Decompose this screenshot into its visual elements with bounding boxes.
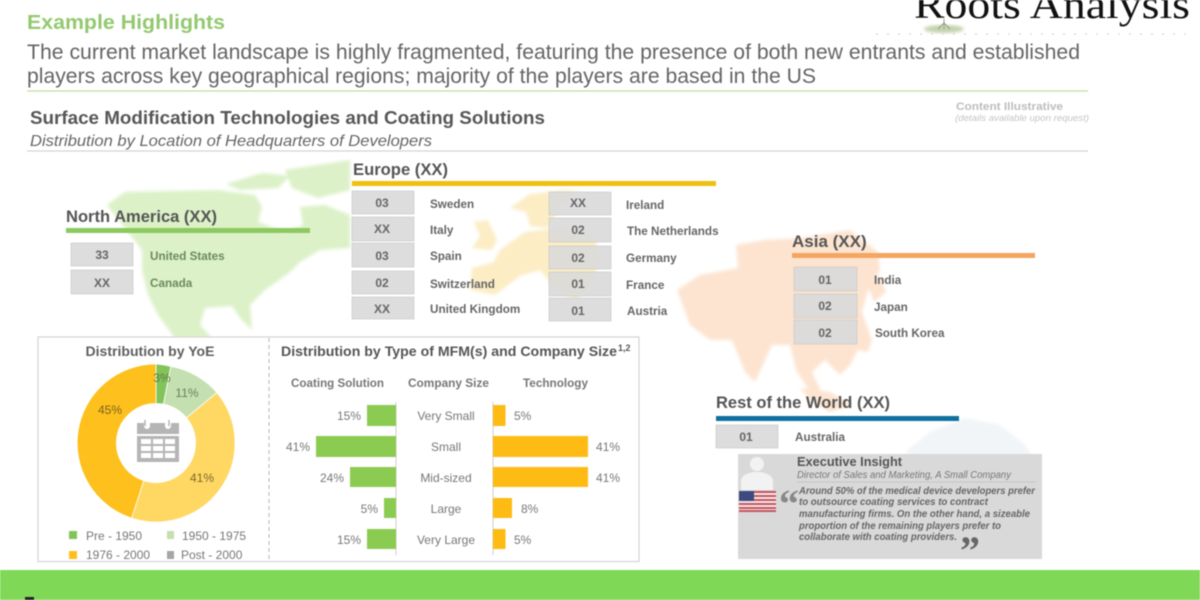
content illustrative note (955, 101, 1089, 123)
map: Europe (470, 190, 600, 300)
donut chart: YoE: 11% (175, 386, 199, 400)
bar chart: Type of MFM and company size: Large (431, 502, 462, 516)
panel: Europe: United Kingdom (430, 303, 520, 316)
panel: North America: United States (150, 250, 225, 263)
legend: YoE: Post - 2000 (181, 548, 243, 562)
panel: North America: 33 (95, 248, 109, 262)
callout: Executive Insight (738, 454, 1042, 573)
panel: Europe: Sweden (430, 198, 474, 211)
callout: Executive Insight: proportion of the remaining players prefer to (798, 521, 1001, 532)
callout: Executive Insight: ” (960, 528, 980, 573)
panel: Rest of the World: 01 (739, 430, 753, 444)
bar chart: Type of MFM and company size: Mid-sized (420, 471, 472, 485)
panel: Rest of the World (716, 393, 959, 448)
bar chart: Type of MFM and company size: 41% (596, 471, 620, 485)
donut chart: YoE (77, 343, 235, 522)
chart title block: Distribution by Location of Headquarters of Developers (30, 133, 432, 150)
callout: Executive Insight: Executive Insight (797, 455, 903, 469)
panel: Europe: Europe (XX) (353, 160, 448, 179)
panel: Europe: XX (374, 302, 390, 316)
callout: Executive Insight: manufacturing firms. On the other hand, a sizeable (799, 509, 1030, 520)
panel: Europe: Austria (627, 305, 668, 318)
bar chart: Type of MFM and company size: 5% (514, 409, 532, 423)
panel: Europe: Switzerland (430, 278, 495, 291)
panel: Asia: India (874, 274, 902, 287)
map: North America (107, 160, 350, 338)
panel: Asia: 02 (818, 299, 832, 313)
bar chart: Type of MFM and company size: 41% (286, 440, 310, 454)
logo (876, 0, 1190, 34)
donut chart: YoE: 3% (153, 371, 171, 385)
bar chart: Type of MFM and company size: 8% (521, 502, 539, 516)
panel: Europe: Spain (430, 250, 462, 263)
bar chart: Type of MFM and company size: Very Small (417, 409, 475, 423)
bar chart: Type of MFM and company size: Distribution by Type of MFM(s) and Company Size (281, 343, 617, 359)
panel: Europe: 02 (571, 251, 585, 265)
panel: Europe: Italy (430, 224, 454, 237)
legend: YoE: Pre - 1950 (86, 529, 142, 543)
callout: Executive Insight: “ (779, 481, 799, 526)
callout: Executive Insight: Around 50% of the medical device developers prefer (798, 486, 1036, 497)
legend: YoE: 1976 - 2000 (86, 548, 150, 562)
bar chart: Type of MFM and company size (281, 343, 631, 555)
legend: YoE (69, 529, 246, 562)
panel: Europe: 01 (571, 304, 585, 318)
summary text (27, 40, 1080, 88)
heading: Example Highlights: Example Highlights (27, 12, 225, 34)
panel: Asia: Asia (XX) (792, 232, 867, 251)
bar chart: Type of MFM and company size: Very Large (417, 533, 475, 547)
bar chart: Type of MFM and company size: Company Size (408, 378, 489, 390)
panel: Europe: 03 (375, 249, 389, 263)
panel: Europe: 01 (571, 277, 585, 291)
panel: Asia: South Korea (875, 327, 945, 340)
legend: YoE: 1950 - 1975 (182, 529, 246, 543)
panel: Europe: XX (570, 196, 586, 210)
bar chart: Type of MFM and company size: 24% (320, 471, 344, 485)
map: Australia (905, 418, 1035, 470)
donut chart: YoE: 41% (190, 471, 214, 485)
panel: Europe: Ireland (626, 199, 664, 212)
bar chart: Type of MFM and company size: 1,2 (618, 343, 631, 353)
panel: Europe: France (626, 279, 665, 292)
bar chart: Type of MFM and company size: 15% (337, 409, 361, 423)
bar chart: Type of MFM and company size: 5% (514, 533, 532, 547)
panel: Distribution by YoE and MFM (38, 337, 639, 562)
panel: Europe: 02 (375, 276, 389, 290)
bar chart: Type of MFM and company size: 41% (596, 440, 620, 454)
panel: Rest of the World: Australia (795, 431, 846, 444)
footer band (0, 570, 1200, 600)
donut chart: YoE: 45% (98, 403, 122, 417)
panel: Asia: 02 (818, 326, 832, 340)
bar chart: Type of MFM and company size: Technology (523, 378, 589, 390)
callout: Executive Insight: Director of Sales and Marketing, A Small Company (797, 470, 1012, 481)
panel: Europe: The Netherlands (627, 225, 719, 238)
summary text: players across key geographical regions; majority of the players are based in the US (27, 64, 816, 88)
panel: Europe (352, 160, 719, 321)
bar chart: Type of MFM and company size: Coating Solution (291, 378, 384, 390)
panel: North America (66, 207, 310, 294)
panel: North America: Canada (150, 277, 193, 290)
content illustrative note: (details available upon request) (955, 113, 1089, 123)
bar chart: Type of MFM and company size: 5% (361, 502, 378, 516)
panel: Europe: 03 (375, 196, 389, 210)
chart title block: Surface Modification Technologies and Coating Solutions (30, 108, 545, 128)
panel: Asia: 01 (818, 273, 832, 287)
map: Asia (677, 230, 886, 412)
callout: Executive Insight: to outsource coating services to contract (799, 497, 989, 508)
content illustrative note: Content Illustrative (956, 101, 1063, 113)
bar chart: Type of MFM and company size: Small (431, 440, 461, 454)
panel: Europe: 02 (571, 223, 585, 237)
panel: North America: North America (XX) (66, 207, 217, 226)
panel: Asia (792, 232, 1035, 344)
chart title block (30, 108, 545, 150)
bar chart: Type of MFM and company size: 15% (337, 533, 361, 547)
panel: North America: XX (94, 276, 110, 290)
panel: Europe: XX (374, 222, 390, 236)
panel: Rest of the World: Rest of the World (XX) (716, 393, 890, 412)
callout: Executive Insight: collaborate with coating providers. (799, 532, 957, 543)
panel: Asia: Japan (874, 301, 908, 314)
panel: Europe: Germany (626, 252, 677, 265)
summary text: The current market landscape is highly fragmented, featuring the presence of both new entrants and established (27, 40, 1080, 64)
icon: calendar (137, 420, 179, 462)
donut chart: YoE: Distribution by YoE (86, 343, 214, 359)
